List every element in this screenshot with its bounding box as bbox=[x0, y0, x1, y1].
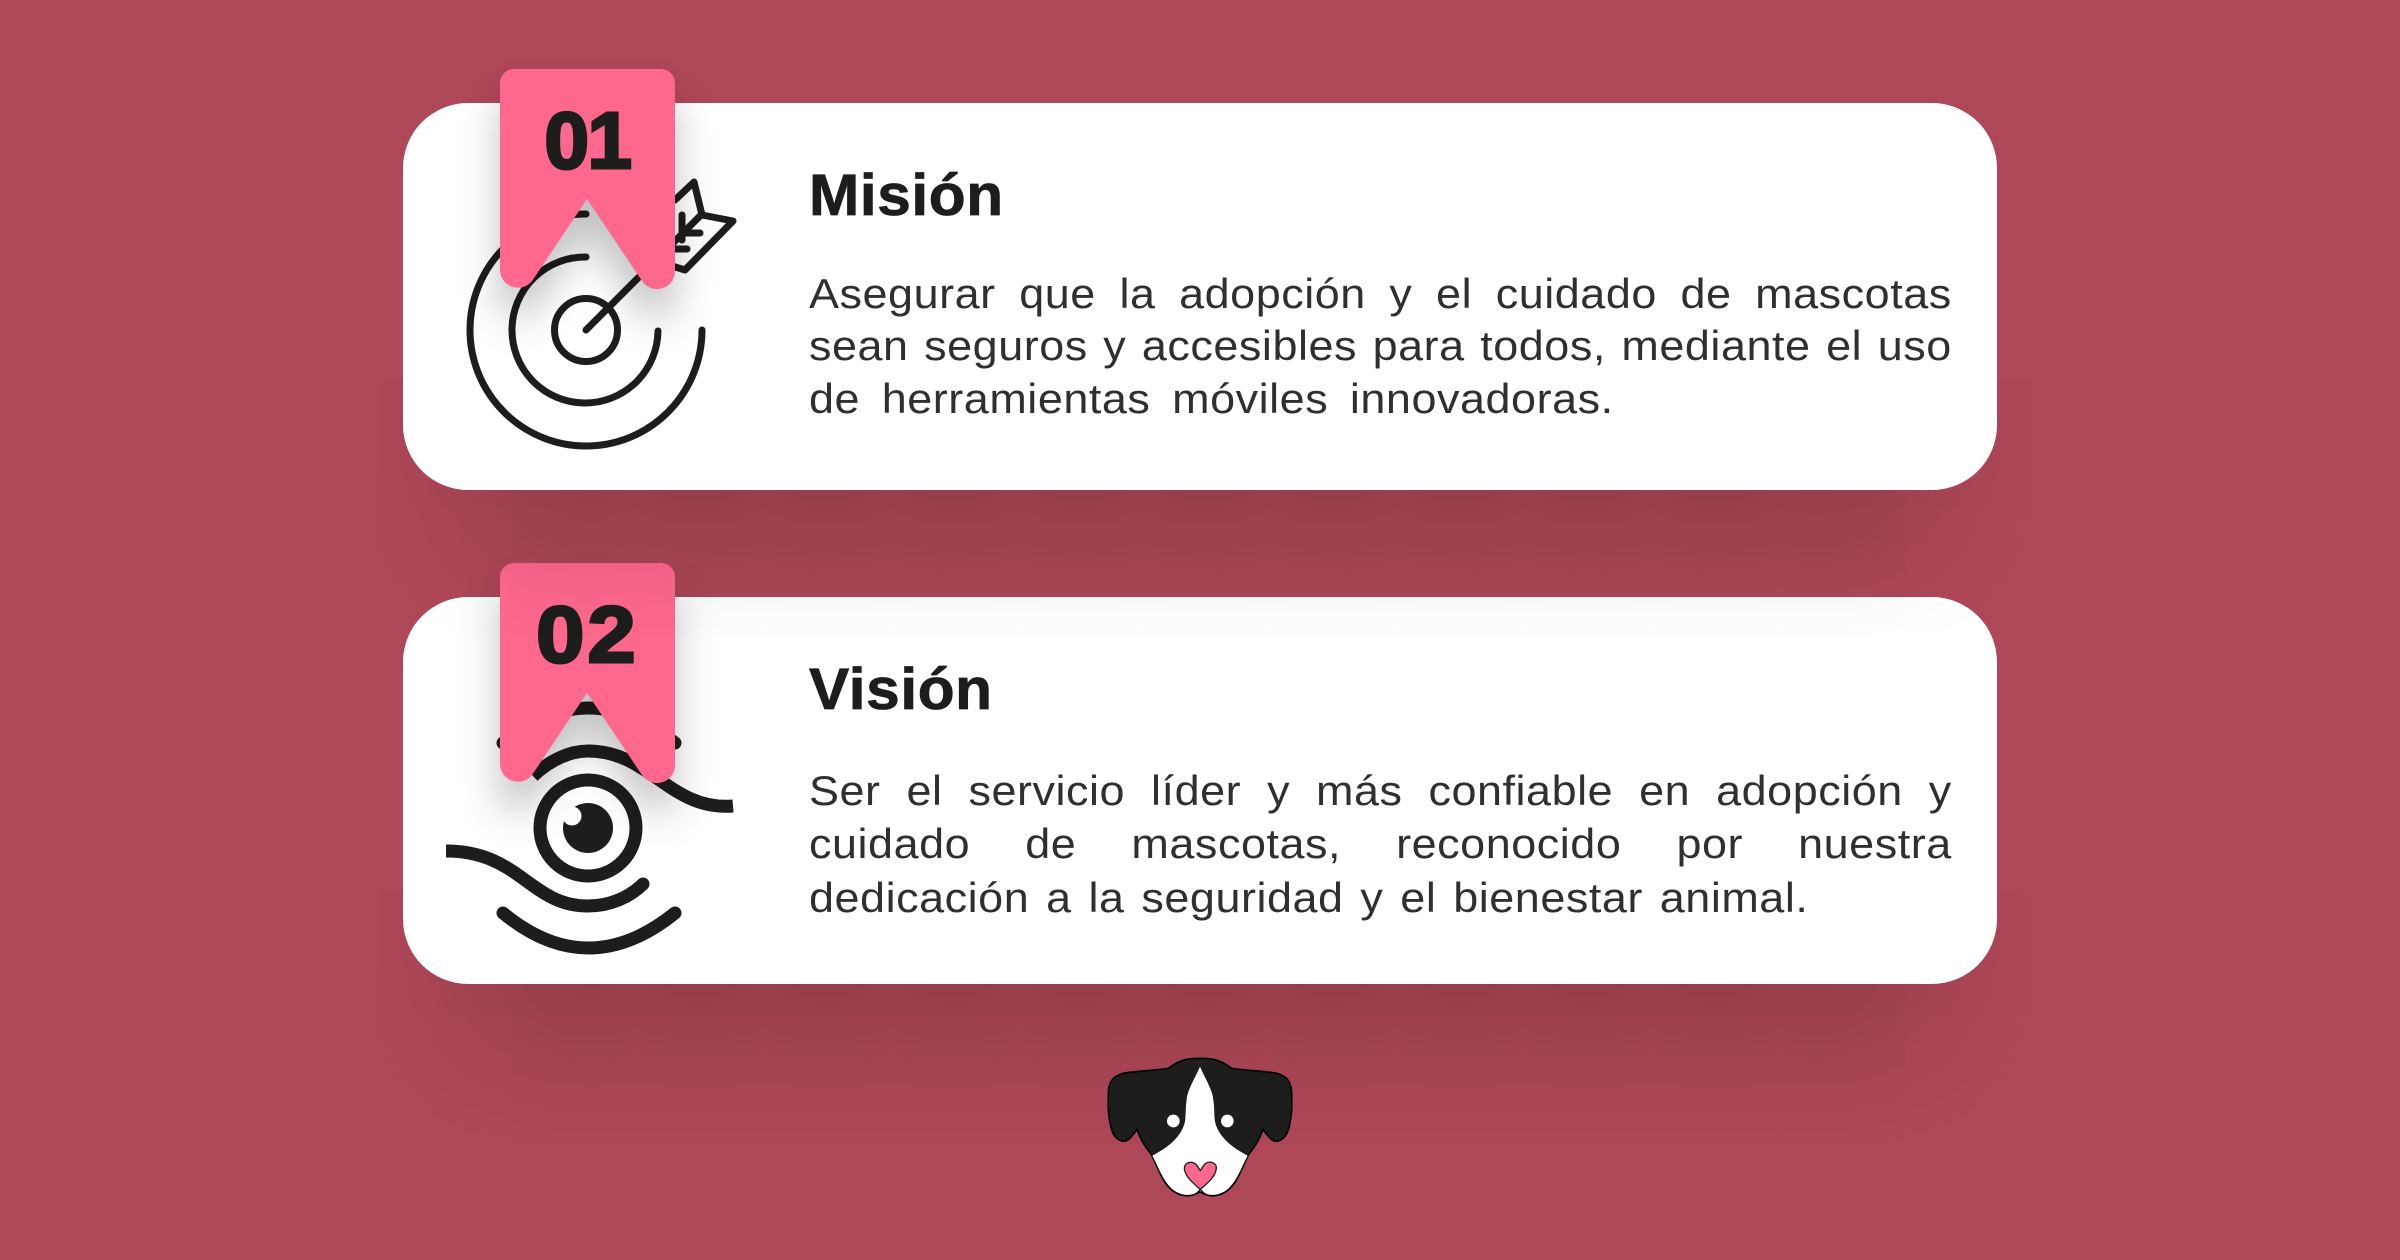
text: misión description: de herramientas móviles innovadoras. bbox=[809, 375, 1614, 422]
text: visión description bbox=[809, 767, 1952, 921]
card background: misión bbox=[403, 103, 1997, 490]
text: misión description: Asegurar que la adopción y el cuidado de mascotas bbox=[809, 270, 1952, 317]
text: visión description: cuidado de mascotas, reconocido por nuestra bbox=[809, 820, 1952, 867]
heading: Misión: Misión bbox=[809, 163, 1004, 228]
heading: Visión: Visión bbox=[809, 657, 993, 722]
card background: visión bbox=[403, 597, 1997, 984]
text: misión description: sean seguros y accesibles para todos, mediante el uso bbox=[809, 322, 1952, 369]
panel: visión bbox=[403, 563, 1997, 1073]
text: misión description bbox=[809, 270, 1952, 422]
number 02: 02 bbox=[536, 590, 639, 679]
text: visión description: dedicación a la seguridad y el bienestar animal. bbox=[809, 874, 1808, 921]
panel: misión bbox=[403, 69, 1997, 592]
number 01: 01 bbox=[544, 96, 630, 185]
text: visión description: Ser el servicio líder y más confiable en adopción y bbox=[809, 767, 1952, 814]
